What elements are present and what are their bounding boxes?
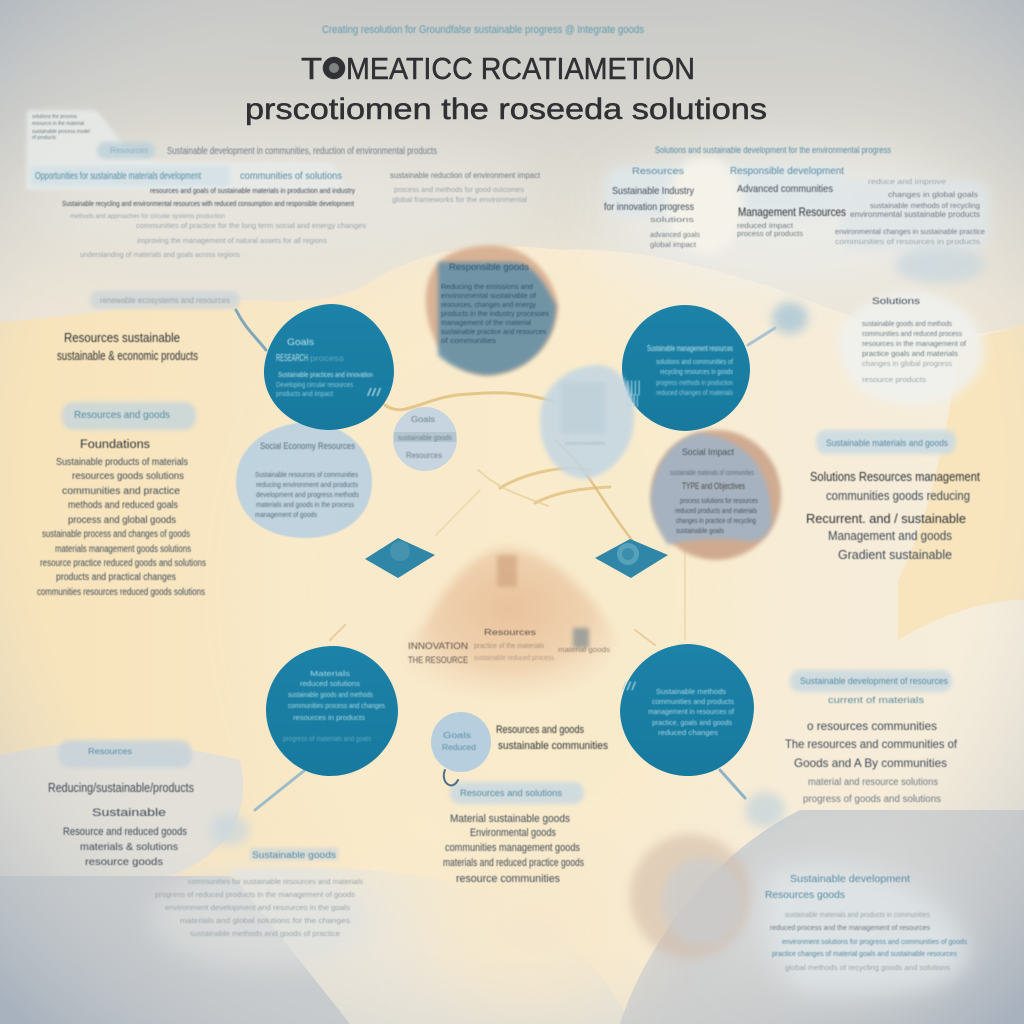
blob: right tan and blue: TYPE and Objectives [682, 481, 745, 491]
text block: right middle: Gradient sustainable [838, 548, 952, 562]
circle: top right: |||| [626, 391, 639, 407]
circle: bottom left: reduced solutions [300, 679, 360, 688]
text block: left upper [57, 331, 198, 363]
panel: far right callout text: communities and reduced process [862, 331, 962, 338]
text block: right lower: material and resource solutions [808, 777, 938, 788]
text block: bottom left: environment development and resources in the goals [165, 905, 351, 912]
text block: top left: global frameworks for the environmental [392, 197, 527, 204]
panel: far right callout text: resources in the management of [862, 341, 966, 348]
diamond icon: right [595, 539, 668, 578]
blob: lower centre tan: INNOVATION [408, 641, 468, 651]
text block: right middle: Management and goods [828, 529, 952, 543]
text block: right middle: communities goods reducing [826, 489, 970, 503]
blob: lower centre tan: THE RESOURCE [408, 655, 468, 665]
text block: bottom left: communities for sustainable resources and materials [188, 879, 364, 886]
small circle: centre left: Goals [411, 415, 435, 424]
text block: top left: Sustainable development in communities, reduction of environmental products [167, 146, 437, 157]
text block: top left: sustainable process model [32, 129, 90, 135]
circle: bottom left [266, 646, 398, 776]
text block: bottom left: materials and global solutions for the changes [180, 918, 351, 925]
text block: left middle: Foundations [80, 439, 150, 451]
blob: top centre: resources, changes and energy [441, 300, 536, 309]
text block: top left: improving the management of natural assets for all regions [137, 238, 328, 245]
text block: top left: renewable ecosystems and resources [100, 295, 230, 305]
text block: left middle: methods and reduced goals [68, 500, 178, 511]
text block: top left: Sustainable recycling and environmental resources with reduced consumption and responsible development [62, 199, 355, 208]
text block: right lower: The resources and communities of [785, 737, 958, 751]
text block: top left: process and methods for good outcomes [394, 187, 525, 194]
blob: left pale blue: materials and goods in the process [256, 500, 354, 509]
blob: right tan and blue: sustainable materials of communities [670, 468, 754, 477]
circle: bottom left: resources in products [293, 713, 365, 722]
text block: top left: Resources [110, 146, 148, 155]
text block: bottom left: Resources [88, 746, 132, 756]
blob: top centre: sustainable practice and resources [441, 327, 546, 336]
text block: top right: Management Resources [738, 205, 846, 219]
circle: top left: Goals [287, 337, 314, 348]
text block: top right: for innovation progress [604, 201, 694, 213]
text block: bottom right: global methods of recycling goods and solutions [785, 965, 951, 972]
text block: bottom right: Resources goods [765, 890, 845, 901]
blob: right tan and blue: reduced products and materials [675, 506, 757, 515]
circle: bottom left: progress of materials and goals [283, 736, 371, 743]
blob: right tan and blue: process solutions for resources [680, 496, 758, 505]
circle: bottom right: reduced changes [658, 728, 718, 737]
small circle with caption [431, 712, 608, 772]
panel: far right callout text [862, 296, 966, 384]
text block: top left: Opportunities for sustainable materials development [35, 170, 201, 182]
text block: right middle [806, 438, 980, 562]
text block: top right: Sustainable Industry [612, 185, 695, 197]
title: prscotiomen the roseeda solutions [245, 93, 767, 126]
text block: right lower: current of materials [828, 695, 925, 705]
text block: right lower: progress of goods and solutions [803, 794, 941, 805]
text block: left middle: Sustainable products of materials [56, 457, 188, 468]
text block: top left: methods and approaches for circular systems production [70, 213, 225, 220]
text block: top right: Resources [632, 166, 685, 176]
text block: right lower: Goods and A By communities [794, 756, 947, 770]
text block: bottom right: Sustainable development [790, 873, 910, 885]
blob: lower centre tan: sustainable reduced process [474, 655, 554, 662]
small circle with caption: Goals [443, 731, 471, 740]
text block: bottom left: Reducing/sustainable/products [48, 781, 194, 795]
blob: centre pale blue [540, 365, 634, 479]
text block: top right: solutions [650, 217, 695, 224]
text block: left middle: communities resources reduced goods solutions [37, 587, 205, 598]
blob: top centre: products in the industry processes [441, 309, 549, 318]
blob: lower centre tan: Resources [484, 627, 536, 637]
text block: top right [604, 145, 985, 249]
circle: bottom right: communities and products [652, 697, 734, 706]
blob: left pale blue: development and progress methods [256, 490, 359, 499]
text block: bottom centre: Material sustainable goods [450, 813, 570, 825]
text block: left middle: sustainable process and changes of goods [42, 529, 190, 540]
blob: right tan and blue: changes in practice of recycling [676, 516, 756, 525]
circle: bottom right: Sustainable methods [656, 687, 726, 696]
text block: left middle: products and practical changes [56, 572, 176, 583]
text block: bottom centre: resource communities [456, 873, 560, 885]
circle: bottom right: management in resources of [648, 707, 735, 716]
text block: left middle: materials management goods solutions [55, 544, 191, 555]
blob: top centre: environmental sustainable of [441, 291, 537, 300]
blob: left pale blue: Sustainable resources of communities [255, 470, 358, 479]
text block: top left: communities of practice for the long term social and energy changes [136, 223, 367, 230]
blob: top centre: management of the material [441, 318, 531, 327]
text block: right middle: Sustainable materials and goods [826, 438, 948, 449]
text block: top left: resource in the material [32, 121, 84, 127]
text block: top right: Responsible development [730, 166, 844, 177]
text block: top right: global impact [650, 242, 696, 249]
text block: top left: communities of solutions [240, 170, 342, 182]
text block: bottom right: environment solutions for progress and communities of goods [782, 939, 967, 946]
blob: centre pale blue: communities [565, 441, 606, 447]
text block: top right: reduce and improve [868, 179, 946, 186]
panel: far right callout text: practice goals and materials [862, 351, 959, 358]
circle: top left: Sustainable practices and innovation [278, 370, 373, 379]
text block: bottom centre: communities management goods [445, 842, 580, 854]
diamond icon: left [365, 538, 435, 578]
text block: bottom right: practice changes of material goals and sustainable resources [772, 951, 957, 958]
circle: top right [622, 305, 750, 431]
text block: left middle: process and global goods [68, 515, 176, 526]
circle: top left: Developing circular resources [276, 380, 353, 389]
text block: top left: of products [32, 135, 56, 141]
blob: left pale blue: Social Economy Resources [260, 441, 355, 452]
circle: top left: /// [367, 387, 382, 399]
title: T [301, 51, 322, 86]
text block: bottom left: Sustainable [92, 807, 166, 819]
connector lines [236, 310, 775, 810]
text block: right middle: Recurrent. and / sustainable [806, 511, 966, 526]
text block: bottom left [48, 746, 364, 938]
circle: bottom right: /// [622, 679, 637, 693]
circle: top left: process [310, 354, 344, 363]
text block: bottom left: Sustainable goods [252, 850, 336, 861]
small circle: centre left: Resources [406, 451, 442, 460]
blob: top centre: of communities [441, 336, 496, 345]
circle: top left [264, 304, 394, 430]
blob: lower centre tan: material goods [558, 647, 611, 654]
panel: far right callout text: changes in global progress [862, 361, 953, 368]
text block: bottom left: materials & solutions [80, 841, 178, 853]
text block: bottom right [765, 873, 967, 972]
text block: bottom centre: Resources and solutions [460, 788, 562, 799]
small circle: centre left [393, 407, 457, 471]
small circle: centre left: sustainable goods [398, 433, 452, 442]
blob: top centre: Responsible goods [449, 262, 530, 272]
text block: bottom centre [443, 788, 584, 885]
text block: left middle [37, 410, 206, 598]
panel: far right callout text: resource products [862, 377, 927, 384]
panel: far right callout text: sustainable goods and methods [862, 321, 952, 328]
text block: right lower: Sustainable development of resources [800, 676, 948, 687]
circle: top right: progress methods in production [656, 378, 733, 387]
text block: top right: Advanced communities [737, 184, 833, 195]
text block: bottom left: Resource and reduced goods [63, 826, 187, 838]
small circle with caption: Resources and goods [496, 724, 584, 736]
text block: left middle: resources goods solutions [72, 471, 184, 482]
text block: top right: communities of resources in products [835, 239, 981, 246]
text block: top left [32, 114, 541, 305]
panel: far right callout text: Solutions [872, 296, 921, 306]
circle: top right: reduced changes of materials [656, 388, 733, 397]
text block: left upper: Resources sustainable [64, 331, 180, 345]
circle: bottom left: Materials [310, 669, 350, 678]
blob: left pale blue: management of goods [255, 510, 317, 519]
text block: top right: advanced goals [650, 232, 701, 239]
text block: left upper: sustainable & economic products [57, 349, 198, 363]
text block: top right: Solutions and sustainable development for the environmental progress [655, 145, 891, 155]
blob: lower centre tan: practice of the materials [474, 643, 544, 650]
text block: bottom centre: Environmental goods [470, 827, 556, 839]
circle: bottom left: communities process and changes [288, 701, 385, 710]
text block: left middle: communities and practice [62, 486, 180, 497]
blob: right tan and blue: Social Impact [682, 447, 734, 457]
circle: top left: products and impact [276, 389, 334, 398]
text block: top left: sustainable reduction of environment impact [390, 171, 541, 180]
small circle with caption: sustainable communities [498, 740, 608, 752]
text block: bottom centre: materials and reduced practice goods [443, 857, 584, 869]
text block: right lower: o resources communities [807, 719, 937, 733]
text block: top right: environmental sustainable products [850, 210, 980, 219]
text block: top right: process of products [737, 231, 804, 238]
circle: bottom right [620, 644, 754, 776]
blob: bottom right tan [630, 834, 750, 958]
blob: top centre: Reducing the emissions and [441, 282, 533, 291]
circle: bottom right: practice, goals and goods [652, 718, 732, 727]
text block: right middle: Solutions Resources management [810, 469, 980, 484]
text block: left middle: Resources and goods [74, 410, 170, 421]
text block: top left: solutions the process [32, 114, 77, 120]
circle: top right: |||| [626, 379, 641, 396]
text block: top left: understanding of materials and goals across regions [80, 252, 240, 259]
text block: bottom right: sustainable materials and products in communities [785, 912, 930, 919]
text block: bottom left: progress of reduced products in the management of goods [155, 892, 356, 899]
header label: Creating resolution for Groundfalse sustainable progress @ Integrate goods [322, 24, 644, 36]
text block: top left: resources and goals of sustainable materials in production and industry [150, 188, 355, 195]
circle: bottom left: sustainable goods and methods [288, 690, 373, 699]
text block: top right: environmental changes in sustainable practice [835, 229, 985, 236]
text block: bottom left: resource goods [85, 856, 163, 868]
circle: top right: recycling resources in goods [660, 367, 733, 376]
blob: lower centre tan [403, 548, 615, 698]
text block: top right: sustainable methods of recycling [870, 203, 980, 210]
blob: right tan and blue [651, 430, 781, 560]
blob: top centre [426, 245, 558, 375]
text block: top right: reduced impact [737, 223, 793, 230]
circle: top right: Sustainable management resources [647, 344, 733, 353]
blob: right tan and blue: sustainable goals [676, 526, 724, 535]
small circle with caption: Reduced [442, 743, 476, 752]
circle: top left: RESEARCH [276, 353, 308, 364]
title [245, 51, 767, 126]
text block: top right: changes in global goals [888, 192, 979, 199]
text block: left middle: resource practice reduced goods and solutions [40, 558, 206, 569]
text block: bottom right: reduced process and the management of resources [770, 925, 930, 932]
title: MEATICC RCATIAMETION [346, 51, 695, 86]
text block: bottom left: sustainable methods and goods of practice [190, 931, 340, 938]
blob: left pale blue: reducing environment and products [256, 480, 358, 489]
text block: right lower [785, 676, 958, 805]
circle: top right: solutions and communities of [656, 357, 734, 366]
blob: left pale blue [236, 422, 372, 538]
